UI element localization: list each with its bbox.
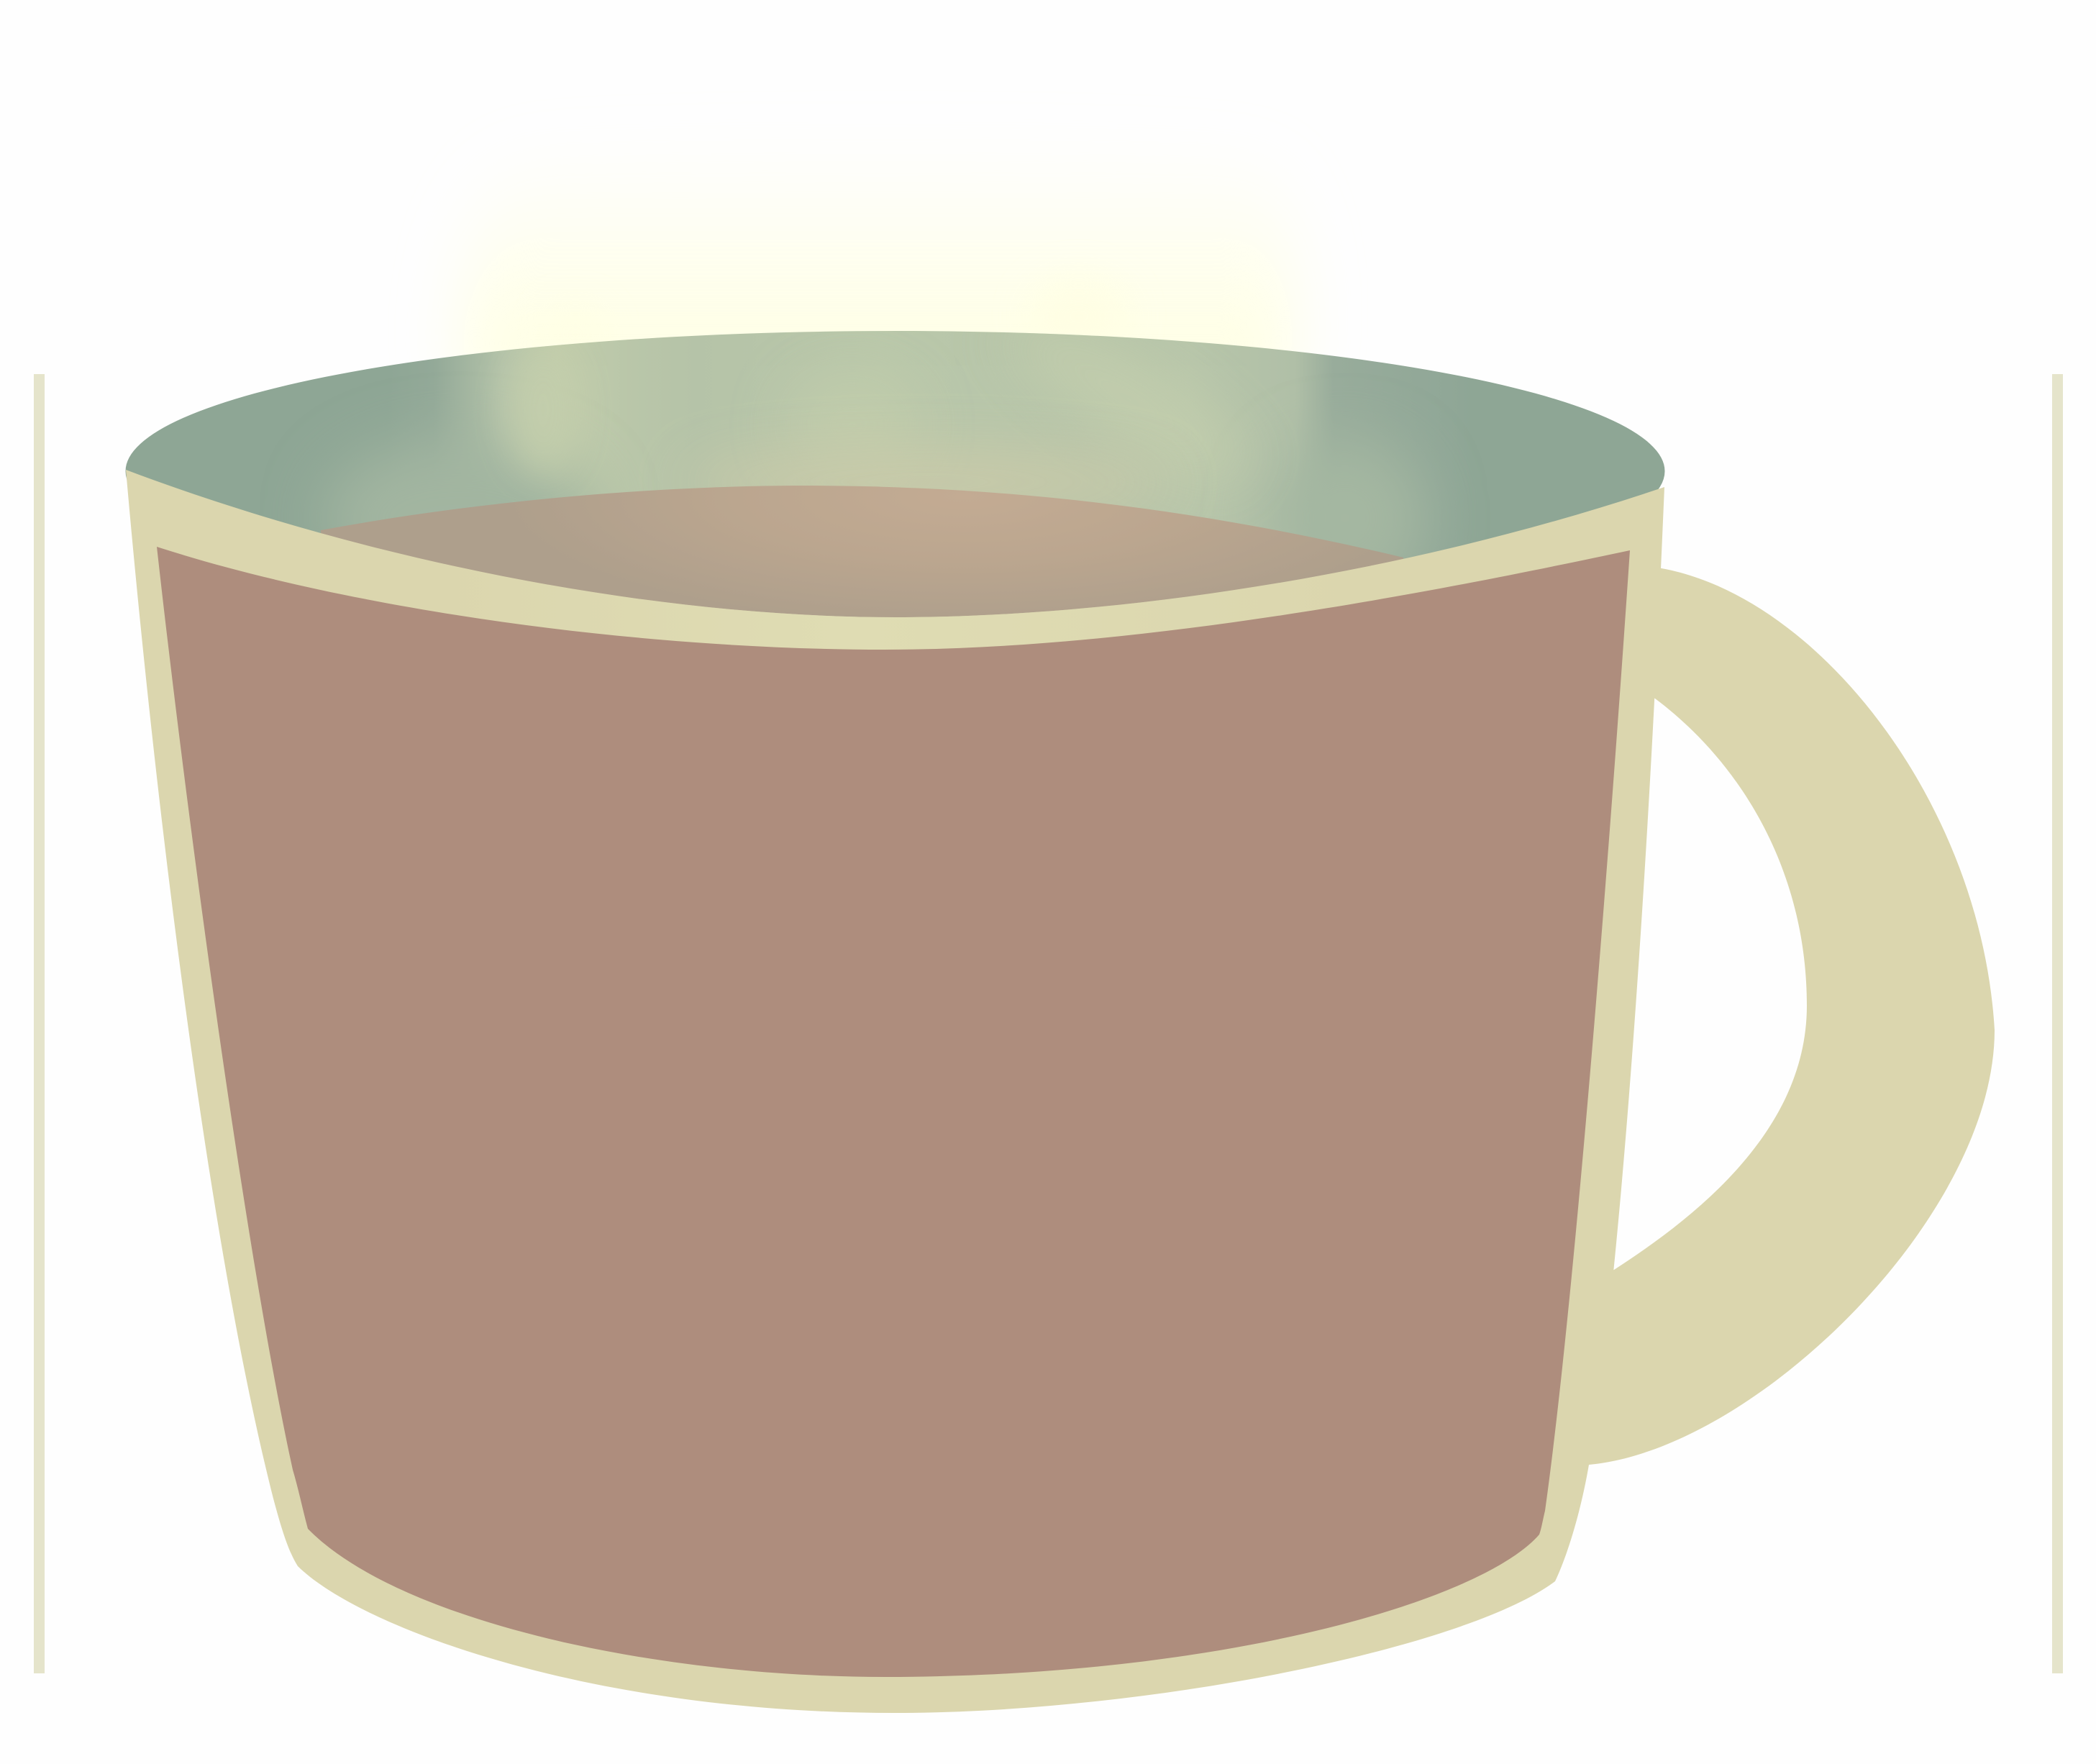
green shade low right [1277, 450, 1424, 558]
mug [122, 298, 1995, 1713]
rim gradient surface [125, 331, 1664, 559]
lighter lip highlight [126, 470, 1664, 650]
light patch left [511, 408, 554, 473]
warm light on inner wall [731, 449, 1125, 502]
coffee surface [321, 486, 1403, 617]
mug body shell [126, 470, 1664, 1713]
right vertical bar [2052, 374, 2063, 1673]
light patch centre [788, 374, 917, 475]
steam main haze [460, 145, 1298, 403]
steam bright patch right [1029, 277, 1129, 356]
green shade low left [326, 443, 599, 529]
steam glow [460, 145, 1298, 403]
mug inner rim [125, 331, 1664, 617]
mug handle [1568, 565, 1995, 1468]
steam bright patch left [547, 306, 604, 363]
diagonal light stripe right [1054, 349, 1172, 435]
left vertical bar [34, 374, 45, 1673]
brown mug front panel [157, 547, 1630, 1677]
